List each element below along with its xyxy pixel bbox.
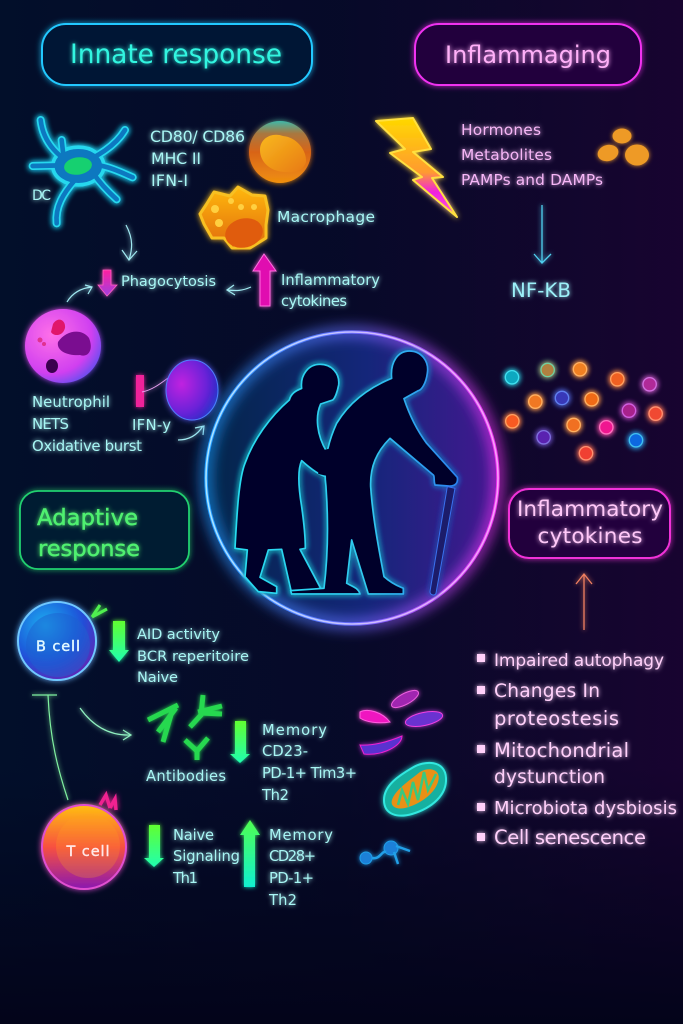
text: neutrophil: Oxidative burst xyxy=(32,437,142,455)
list: hallmarks of ageing: Mitochondrial xyxy=(494,739,629,762)
arrow: to NF-KB xyxy=(534,205,551,263)
inhibition bar xyxy=(136,375,168,407)
arrow: B cell to antibodies xyxy=(80,708,131,740)
list: hallmarks of ageing: Impaired autophagy xyxy=(494,651,664,671)
icon: T cell: T cell xyxy=(66,844,110,860)
text: neutrophil: NETS xyxy=(32,415,69,433)
text: neutrophil xyxy=(32,393,142,455)
text: T cell memory: CD28+ xyxy=(269,848,316,865)
text: DC markers: CD80/ CD86 xyxy=(150,127,245,146)
arrow: green down memory xyxy=(230,721,250,763)
cell label: DC: DC xyxy=(32,188,51,204)
text: B cell changes xyxy=(137,626,249,686)
text: B cell changes: Naive xyxy=(137,669,178,686)
icon: microbes xyxy=(360,841,410,864)
text: DC markers: IFN-I xyxy=(151,171,188,190)
cane xyxy=(430,487,455,595)
icon: macrophage xyxy=(200,187,268,252)
text: B memory xyxy=(261,722,357,804)
label: Antibodies: Antibodies xyxy=(146,768,226,785)
text: T cell memory: PD-1+ xyxy=(269,870,314,887)
arrow: DC to phagocytosis xyxy=(122,225,137,260)
list: hallmarks of ageing: dystunction xyxy=(494,767,605,788)
woman silhouette xyxy=(235,364,339,593)
text: T cell memory: Th2 xyxy=(268,892,297,909)
panel: Inflammatory cytokines heading: cytokines xyxy=(538,524,642,549)
text: T cell naive xyxy=(172,827,240,887)
icon: antibodies xyxy=(148,695,222,760)
arrow: neutrophil to phagocytosis xyxy=(67,285,92,302)
list: hallmarks of ageing xyxy=(477,651,677,849)
panel: Inflammaging heading: Inflammaging xyxy=(445,41,611,69)
text: DC markers: MHC II xyxy=(151,149,201,168)
icon: T cell xyxy=(42,795,126,889)
text: DC markers xyxy=(150,127,245,190)
arrow: to inflammatory cytokines xyxy=(576,574,592,630)
text: T cell naive: Signaling xyxy=(173,848,240,865)
text: neutrophil: Neutrophil xyxy=(32,393,110,411)
text: T cell naive: Th1 xyxy=(172,870,198,887)
label: Macrophage: Macrophage xyxy=(277,208,375,226)
man silhouette xyxy=(291,351,457,594)
icon: lightning bolt xyxy=(376,118,457,217)
label: Inflammatory cytokines left xyxy=(281,272,380,310)
icon: orange cell xyxy=(249,121,311,183)
arrow: green down xyxy=(109,621,129,662)
text: inflammaging triggers: PAMPs and DAMPs xyxy=(461,171,603,189)
list: hallmarks of ageing: proteostesis xyxy=(494,707,619,730)
panel: Adaptive response heading: Adaptive xyxy=(37,505,138,531)
arrow: towards IFN-y xyxy=(178,426,204,440)
arrow: inflammatory cytokines up xyxy=(253,254,276,306)
list: hallmarks of ageing: Changes In xyxy=(494,681,600,702)
label: NF-KB: NF-KB xyxy=(511,279,571,302)
arrow: green up T cell xyxy=(240,820,260,887)
panel: central circle with elderly couple xyxy=(206,332,498,624)
text: B memory: CD23- xyxy=(262,743,308,760)
icon: B cell xyxy=(18,602,107,680)
arrow: green down T cell xyxy=(144,825,164,867)
text: inflammaging triggers: Metabolites xyxy=(461,146,552,164)
icon: neutrophil xyxy=(25,309,101,383)
text: B cell changes: AID activity xyxy=(137,626,220,643)
label: Inflammatory cytokines left: Inflammatory xyxy=(281,272,380,289)
panel: Inflammatory cytokines heading xyxy=(509,489,670,558)
label: Phagocytosis: Phagocytosis xyxy=(121,274,216,290)
arm join patch xyxy=(317,448,331,477)
panel: Inflammatory cytokines heading: Inflammatory xyxy=(517,497,663,522)
inhibition line T to B xyxy=(32,695,68,800)
panel: Innate response heading xyxy=(42,24,312,85)
icon: IFN-y cell xyxy=(166,360,218,420)
text: inflammaging triggers: Hormones xyxy=(461,121,541,139)
text: inflammaging triggers xyxy=(461,121,603,189)
list: hallmarks of ageing: Cell senescence xyxy=(494,826,646,849)
text: B memory: Memory xyxy=(262,722,327,739)
silhouettes xyxy=(235,351,457,595)
panel: Inflammaging heading xyxy=(415,24,641,85)
label: Inflammatory cytokines left: cytokines xyxy=(281,293,347,310)
chart: cytokine dots xyxy=(505,363,662,460)
ring xyxy=(207,333,497,623)
text: B cell changes: BCR reperitoire xyxy=(137,648,249,665)
arrow: phagocytosis down xyxy=(98,270,117,296)
arrow: cytokines to phagocytosis xyxy=(227,285,251,295)
panel: Adaptive response heading xyxy=(20,491,189,569)
icon: bacteria xyxy=(360,687,444,754)
label: IFN-y: IFN-y xyxy=(132,416,171,434)
text: T cell memory xyxy=(268,827,333,909)
panel: Innate response heading: Innate response xyxy=(70,39,282,70)
icon: dendritic cell xyxy=(33,120,133,223)
text: B memory: PD-1+ Tim3+ xyxy=(262,765,357,782)
icon: metabolite spheres xyxy=(596,128,649,166)
icon: mitochondrion xyxy=(384,763,446,816)
icon: B cell: B cell xyxy=(36,639,80,655)
panel: Adaptive response heading: response xyxy=(38,536,140,562)
text: B memory: Th2 xyxy=(261,787,289,804)
list: hallmarks of ageing: Microbiota dysbiosis xyxy=(494,798,677,819)
text: T cell naive: Naive xyxy=(173,827,214,844)
text: T cell memory: Memory xyxy=(269,827,333,844)
